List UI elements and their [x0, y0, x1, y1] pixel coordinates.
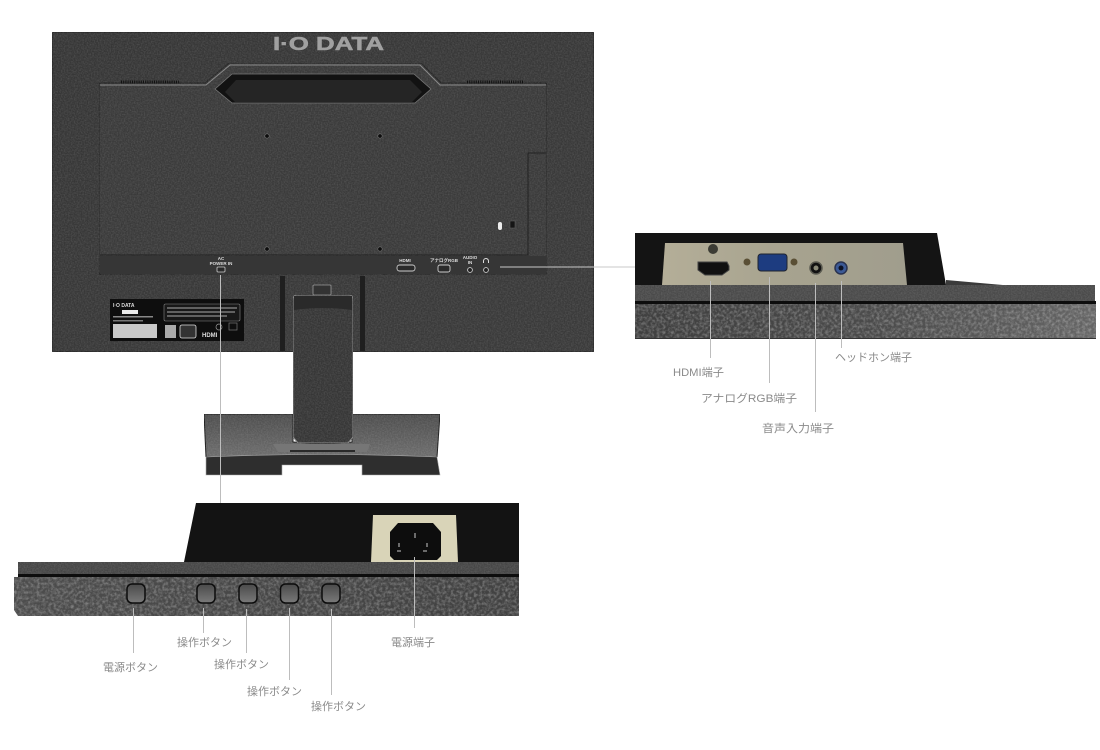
dark housing	[184, 503, 519, 562]
dark housing	[635, 233, 946, 285]
detail panel: input ports	[635, 233, 1096, 339]
headphone jack	[835, 262, 847, 274]
side door outline	[100, 153, 546, 255]
operation button 3	[280, 584, 298, 603]
callout: analog RGB	[701, 277, 797, 405]
panel highlight edge	[100, 65, 546, 85]
connector line: ports to detail	[500, 266, 636, 268]
stand	[204, 295, 440, 475]
brand logo: I·O DATA	[273, 34, 384, 54]
black seam	[18, 574, 519, 577]
spec label	[110, 299, 244, 341]
stand base top	[204, 414, 440, 457]
callout: power connector: 電源端子	[391, 635, 435, 649]
HDMI port	[698, 262, 729, 275]
left vent	[121, 80, 179, 84]
callout: audio input: 音声入力端子	[762, 421, 834, 435]
operation button 2	[239, 584, 257, 603]
AC power port marking: POWER IN	[210, 261, 232, 266]
callout: operation button 3	[247, 608, 302, 698]
right stand rail	[360, 276, 365, 351]
headphone jack hole	[838, 266, 844, 270]
bar lower edge	[635, 338, 1096, 339]
VESA screw holes	[265, 134, 382, 251]
callout: power button	[103, 608, 158, 674]
audio in marking	[463, 255, 478, 272]
socket pins	[397, 533, 427, 551]
top screw	[708, 244, 718, 254]
plate shadow	[290, 450, 355, 452]
carry handle recess	[215, 74, 431, 103]
audio in jack hole	[814, 266, 818, 270]
callout: operation button 4: 操作ボタン	[311, 699, 366, 713]
rear cover panel	[99, 63, 547, 275]
AC power port marking	[210, 256, 232, 272]
right vent	[467, 80, 524, 84]
VGA port	[758, 254, 787, 271]
operation button 4	[322, 584, 340, 603]
left VGA screw	[744, 258, 750, 266]
HDMI port marking: HDMI	[399, 258, 411, 263]
stand clip	[313, 285, 331, 295]
handle recess inner floor	[225, 80, 422, 102]
kensington slot	[498, 222, 502, 230]
textured front bar	[635, 304, 1096, 338]
callout: HDMI	[673, 281, 724, 379]
power port plate	[371, 515, 458, 562]
headphone marking	[484, 258, 488, 272]
callout: operation button 3: 操作ボタン	[247, 684, 302, 698]
callout: analog RGB: アナログRGB端子	[701, 391, 797, 405]
detail panel: power and buttons	[14, 503, 519, 616]
callout: operation button 2: 操作ボタン	[214, 657, 269, 671]
callout: headphone	[835, 281, 912, 364]
upper bar strip	[635, 285, 1095, 301]
right VGA screw	[790, 258, 798, 266]
power button	[127, 584, 145, 603]
connector line: power to detail	[220, 275, 222, 516]
operation button 1	[197, 584, 215, 603]
lock icon	[510, 221, 515, 228]
upper bar strip	[18, 562, 519, 574]
monitor rear view	[52, 32, 594, 352]
left stand rail	[280, 276, 285, 351]
RGB port marking: アナログRGB	[430, 257, 459, 264]
black seam	[635, 301, 1096, 304]
audio in marking: AUDIO	[463, 255, 478, 260]
callout: power connector	[391, 557, 435, 649]
callout: operation button 2	[214, 609, 269, 671]
spec label: I·O DATA	[113, 303, 135, 309]
right wedge	[946, 280, 1094, 300]
textured front bar	[14, 577, 519, 616]
spec label: HDMI	[202, 333, 218, 339]
callout: operation button 1	[177, 608, 232, 649]
callout: power button: 電源ボタン	[103, 660, 158, 674]
audio in jack	[810, 262, 822, 274]
stand neck	[293, 295, 353, 443]
neck cap	[294, 296, 352, 310]
callout: headphone: ヘッドホン端子	[835, 351, 912, 364]
callout: HDMI: HDMI端子	[673, 366, 724, 379]
audio in marking: IN	[468, 260, 472, 265]
AC power port marking: AC	[218, 256, 225, 261]
lower port strip	[100, 256, 546, 274]
monitor back shell	[52, 32, 594, 352]
HDMI port marking	[397, 258, 415, 271]
stand base front	[206, 454, 440, 475]
RGB port marking	[430, 257, 459, 272]
base centre plate	[273, 444, 370, 452]
power socket	[390, 523, 441, 560]
port plate	[662, 243, 907, 285]
callout: operation button 4	[311, 609, 366, 713]
callout: operation button 1: 操作ボタン	[177, 635, 232, 649]
